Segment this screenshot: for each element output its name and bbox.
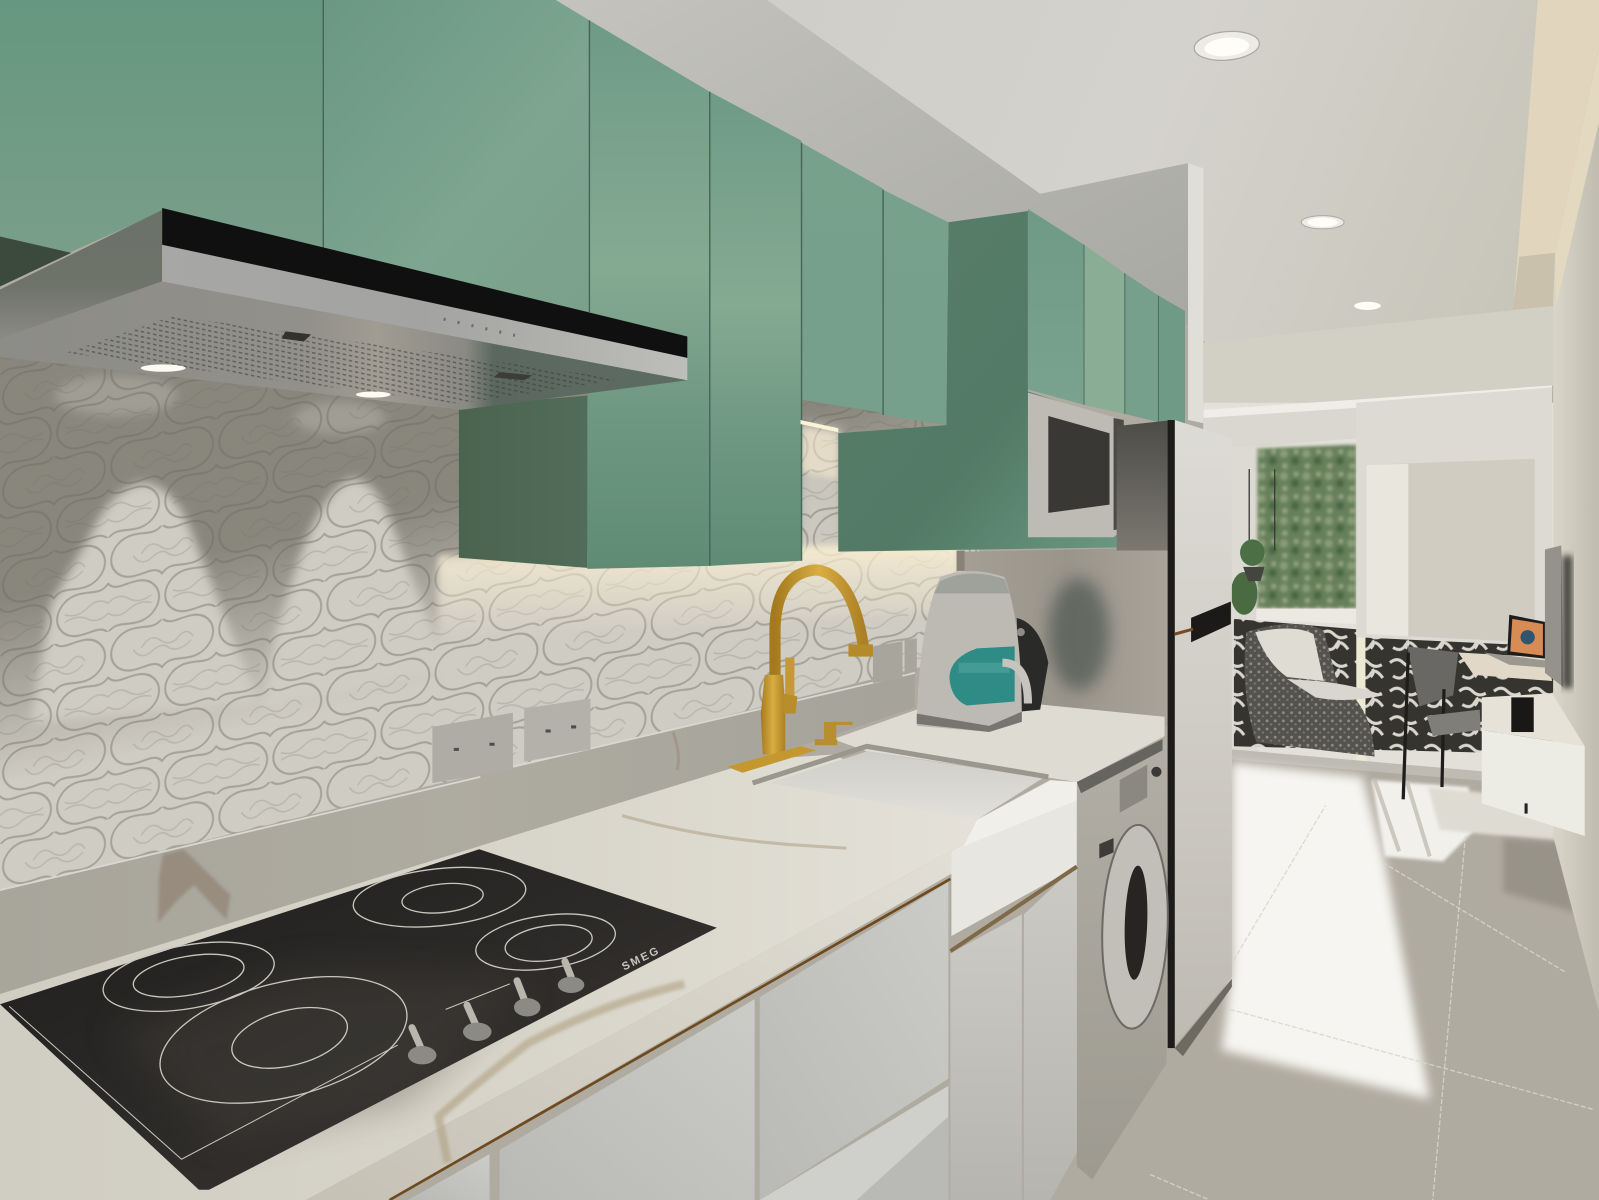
soffit cove lit in cream	[1513, 0, 1599, 312]
stainless splash panel behind appliances	[957, 547, 1169, 726]
wall monitor	[1545, 545, 1563, 687]
main marble worktop	[0, 754, 977, 1200]
trees seen through the window	[1257, 445, 1356, 609]
marble vein on upstand	[158, 849, 230, 923]
induction hob	[0, 849, 717, 1190]
tiled backsplash	[0, 306, 979, 897]
lower cabinets under the worktop	[390, 879, 950, 1200]
range hood	[0, 208, 687, 410]
washer control panel	[1120, 765, 1147, 813]
hob rings	[9, 860, 619, 1159]
upper cabinet door 2	[323, 0, 589, 312]
lower cabinets under the sink	[950, 865, 1077, 1200]
shadow bars across the sunlight	[1375, 780, 1430, 856]
shadow below the fridge	[1175, 979, 1232, 1056]
wall sockets	[432, 638, 917, 783]
soap dispenser	[824, 722, 836, 742]
balcony slab	[1256, 609, 1356, 624]
black box	[1511, 697, 1534, 732]
rear room: window wall and balcony	[1203, 385, 1557, 785]
ceiling	[612, 0, 1540, 343]
under-cabinet glow	[439, 542, 959, 637]
laptop	[1507, 615, 1545, 659]
basin	[770, 751, 1043, 820]
wall cabinets above the microwave	[1028, 209, 1185, 424]
balcony left wall	[1232, 447, 1258, 763]
upper cabinet door 1	[0, 0, 323, 283]
stone rim	[753, 746, 1048, 783]
upper cabinet door 6	[883, 190, 948, 425]
sunlit patch on blind	[1366, 459, 1535, 642]
dark left cabinet underside	[0, 237, 71, 286]
light strip under cabinet 5	[801, 420, 838, 432]
sink	[753, 746, 1077, 936]
marble upstand	[0, 673, 915, 994]
upper cabinet door 3	[587, 20, 710, 569]
door gaps on upper cabinets	[323, 0, 883, 566]
ceiling drop above the window	[1203, 306, 1555, 412]
worktop right of the sink	[833, 705, 1165, 782]
hood black strip	[162, 208, 687, 358]
ceiling downlight 1	[1193, 29, 1261, 63]
balcony lounge chair	[1244, 624, 1383, 756]
lintel above the window	[1203, 408, 1356, 447]
hob knobs	[408, 961, 584, 1064]
hanging plant	[1231, 469, 1275, 615]
washer door	[1099, 824, 1171, 1030]
fridge door gasket	[1168, 420, 1175, 1048]
coffee machine	[917, 571, 1028, 732]
hood vent grille	[66, 316, 622, 404]
shadow over tiles with spotlight cones left clear	[0, 306, 948, 765]
fridge handle	[1191, 602, 1231, 642]
curtain rail	[1203, 385, 1552, 418]
marble vein	[622, 816, 846, 848]
microwave	[1028, 393, 1124, 537]
floor joints	[1150, 805, 1593, 1200]
floor	[1050, 760, 1599, 1200]
glass carafe	[949, 646, 1015, 706]
upper cabinet block beside the microwave	[838, 211, 1117, 552]
ceiling downlight 3	[1354, 302, 1381, 310]
right wall	[1545, 47, 1599, 1012]
washer handle	[1099, 838, 1114, 858]
desk chair	[1403, 646, 1481, 799]
hood control buttons	[444, 319, 515, 335]
carafe handle	[1002, 663, 1028, 703]
kettle	[1017, 618, 1048, 712]
lace balcony screen	[1234, 619, 1557, 754]
apron	[951, 780, 1077, 936]
counter front edge	[306, 844, 964, 1200]
desk with laptop	[1458, 615, 1552, 681]
floating console with box	[1482, 693, 1585, 836]
right bulkhead pillar	[1188, 163, 1203, 423]
sunlight on floor	[1222, 763, 1430, 1099]
hob brand: SMEG	[620, 944, 662, 973]
fridge front	[1168, 420, 1232, 1056]
dark monitor shadow	[1562, 556, 1572, 688]
upper cabinet door 5	[802, 143, 883, 413]
ceiling downlight 2	[1301, 216, 1344, 229]
washing machine	[1077, 739, 1171, 1180]
fridge side	[1117, 420, 1173, 551]
sliding door mullion	[1356, 612, 1365, 765]
floor threshold	[1232, 749, 1499, 783]
faucet	[727, 570, 873, 773]
hood front band	[162, 245, 687, 380]
dark green cabinet side panel	[459, 396, 587, 568]
hood side face	[0, 210, 162, 338]
hood lamps	[141, 364, 186, 372]
roller blind	[1356, 387, 1552, 646]
upper cabinet door 4	[710, 92, 802, 566]
grey wall above the cabinets	[556, 0, 1188, 326]
hood underside	[0, 281, 687, 410]
